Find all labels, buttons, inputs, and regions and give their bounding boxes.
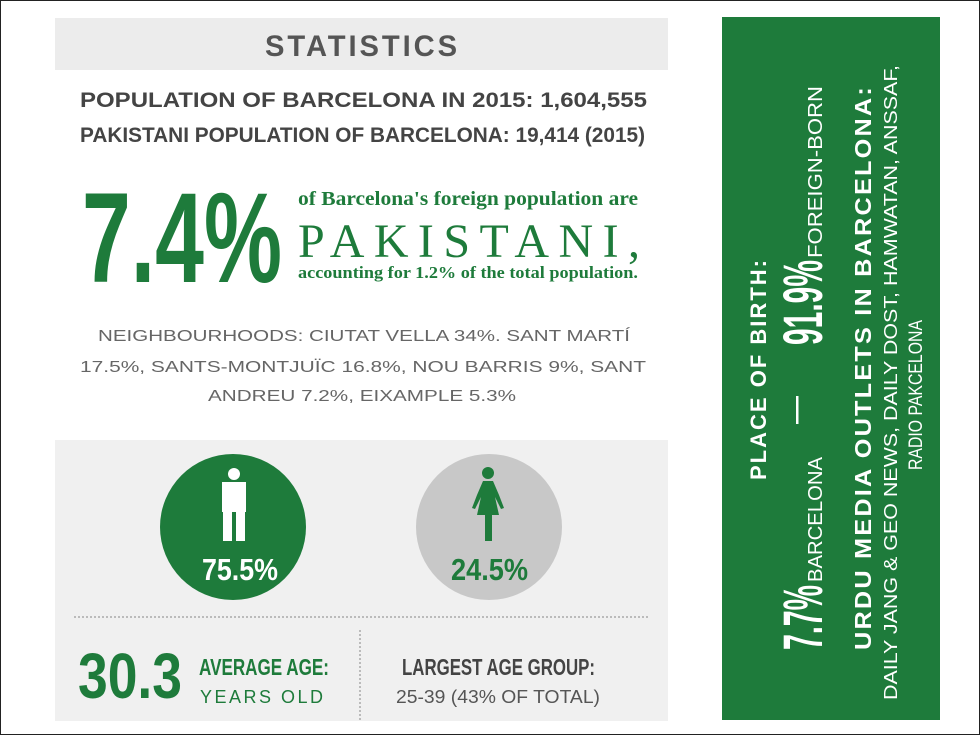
neighbourhoods text (80, 326, 646, 405)
male percent: 75.5% (202, 552, 278, 587)
average age: 30.3 (78, 640, 182, 712)
icon: man (222, 468, 246, 541)
female percent: 24.5% (451, 552, 528, 587)
birth stats: 91.9% (771, 260, 834, 345)
largest age group (396, 654, 600, 707)
population headings (80, 89, 647, 147)
place of birth heading: PLACE OF BIRTH: (746, 258, 771, 480)
panel: green sidebar (722, 17, 940, 720)
title: STATISTICS (265, 30, 460, 63)
stat description: of Barcelona's foreign population are (298, 188, 638, 210)
stat description (298, 188, 640, 282)
birth stats: 7.7% (771, 585, 834, 650)
population headings: POPULATION OF BARCELONA IN 2015: 1,604,555 (80, 89, 647, 112)
title bar (55, 18, 668, 70)
average age (78, 640, 329, 712)
media outlets list: DAILY JANG & GEO NEWS, DAILY DOST, HAMWATAN, ANSSAF, (881, 65, 901, 700)
population headings: PAKISTANI POPULATION OF BARCELONA: 19,414 (2015) (80, 124, 645, 147)
panel: demographics (55, 440, 668, 721)
neighbourhoods text: 17.5%, SANTS-MONTJUÏC 16.8%, NOU BARRIS 9%, SANT (80, 358, 646, 376)
birth stats: FOREIGN-BORN (805, 86, 827, 258)
media outlets list: RADIO PAKCELONA (906, 320, 927, 470)
largest age group: LARGEST AGE GROUP: (402, 654, 595, 680)
male circle (160, 454, 306, 600)
neighbourhoods text: NEIGHBOURHOODS: CIUTAT VELLA 34%. SANT MARTÍ (98, 326, 631, 345)
average age: YEARS OLD (200, 687, 323, 707)
media outlets list (881, 65, 927, 700)
media outlets heading: URDU MEDIA OUTLETS IN BARCELONA: (850, 85, 876, 650)
stat description: PAKISTANI, (298, 215, 640, 268)
female circle (416, 454, 562, 600)
icon: woman (472, 467, 504, 541)
birth stats (771, 86, 834, 650)
stat description: accounting for 1.2% of the total population. (298, 263, 638, 282)
neighbourhoods text: ANDREU 7.2%, EIXAMPLE 5.3% (208, 388, 516, 405)
largest age group: 25-39 (43% OF TOTAL) (396, 687, 600, 707)
average age: AVERAGE AGE: (199, 654, 329, 680)
birth stats: BARCELONA (805, 456, 827, 582)
big stat 7.4%: 7.4% (82, 167, 282, 310)
